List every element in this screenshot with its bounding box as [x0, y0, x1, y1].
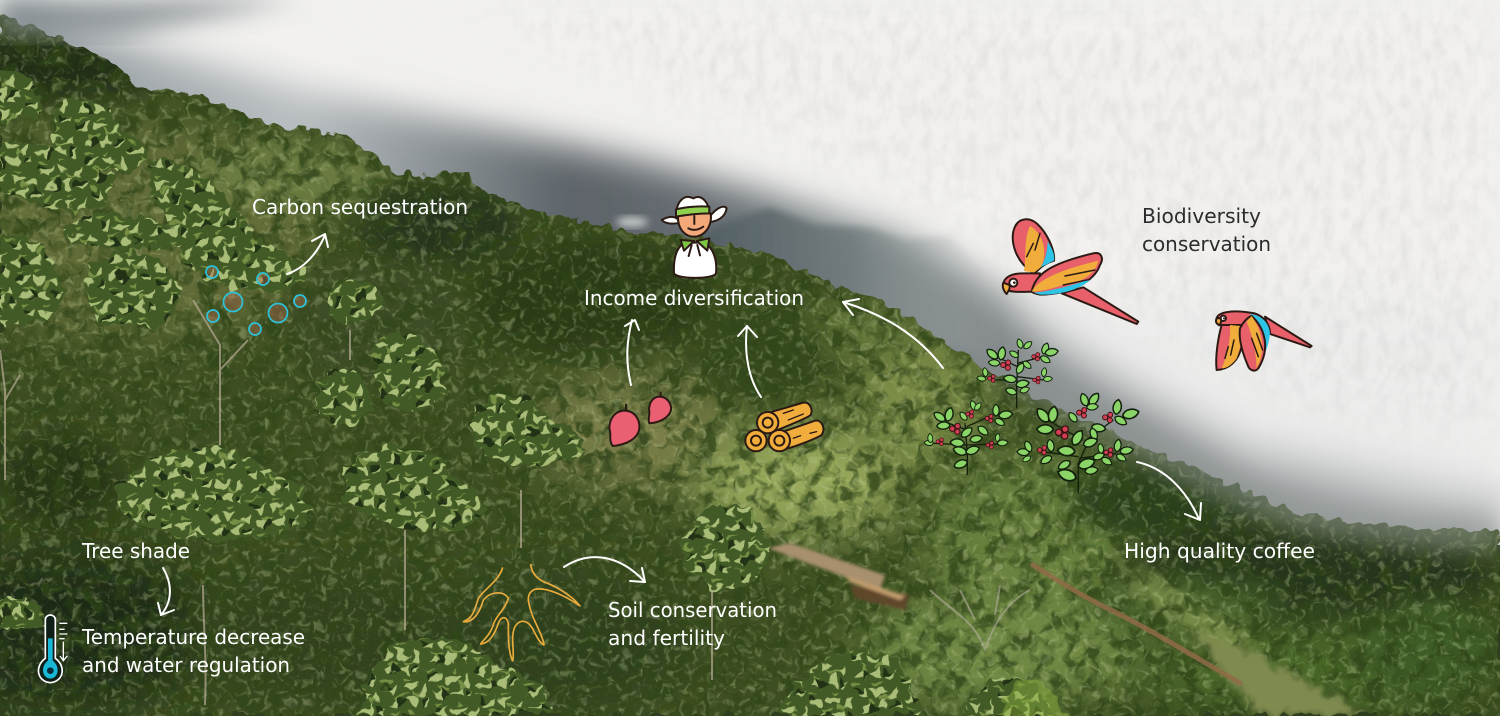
- farm house roof: [768, 543, 910, 610]
- arrow: coffee to income: [843, 299, 943, 368]
- label: Temperature decrease and water regulation: [81, 625, 305, 677]
- shade tree crowns: [0, 71, 1060, 716]
- icon: farmer: [662, 197, 727, 278]
- label: High quality coffee: High quality coffee: [1124, 539, 1315, 563]
- upper paper mist: [280, 0, 1500, 430]
- icon: roots: [463, 564, 580, 661]
- small bright cloud: [616, 217, 648, 227]
- icon: mangoes: [609, 393, 671, 446]
- coffee plant top: [977, 338, 1059, 408]
- label: Temperature decrease and water regulation: and water regulation: [82, 653, 290, 677]
- arrow: roots to soil: [564, 557, 645, 582]
- white bare tree: [930, 585, 1030, 650]
- label: Soil conservation and fertility: [608, 598, 777, 650]
- icon: coffee plants: [924, 338, 1140, 493]
- arrow: shade to temperature: [158, 568, 174, 615]
- lime crowns lower right: [1000, 680, 1065, 716]
- icon: large macaw: [1003, 219, 1138, 324]
- icon: CO2 bubbles: [206, 266, 306, 335]
- label: Biodiversity conservation: [1142, 204, 1271, 256]
- label: Soil conservation and fertility: and fertility: [608, 626, 725, 650]
- label: Biodiversity conservation: Biodiversity: [1142, 204, 1261, 228]
- dirt path: [1033, 565, 1240, 683]
- top left haze: [0, 0, 300, 35]
- icon: timber logs: [745, 403, 823, 451]
- paper grain over fog: [568, 10, 1485, 410]
- arrow: coffee to high quality: [1137, 462, 1201, 520]
- coffee plant left: [924, 400, 1013, 475]
- label: Temperature decrease and water regulation: Temperature decrease: [81, 625, 305, 649]
- label: Tree shade: Tree shade: [81, 539, 190, 563]
- coffee plant right: [1017, 391, 1140, 493]
- arrow: fruit to income: [625, 320, 639, 385]
- label: Biodiversity conservation: conservation: [1142, 232, 1271, 256]
- label: Carbon sequestration: Carbon sequestration: [252, 195, 468, 219]
- label: Income diversification: Income diversification: [584, 286, 804, 310]
- arrow: carbon: [287, 234, 328, 274]
- icon: small macaw: [1216, 311, 1312, 371]
- icon: thermometer: [38, 615, 67, 683]
- tree trunks: [0, 300, 712, 705]
- lower right fog over ridge: [1000, 290, 1500, 515]
- label: Soil conservation and fertility: Soil conservation: [608, 598, 777, 622]
- clearing: [1190, 630, 1365, 716]
- distant mountain: [690, 208, 1010, 360]
- soft haze along right ridge: [1010, 370, 1500, 535]
- arrow: timber to income: [738, 326, 761, 397]
